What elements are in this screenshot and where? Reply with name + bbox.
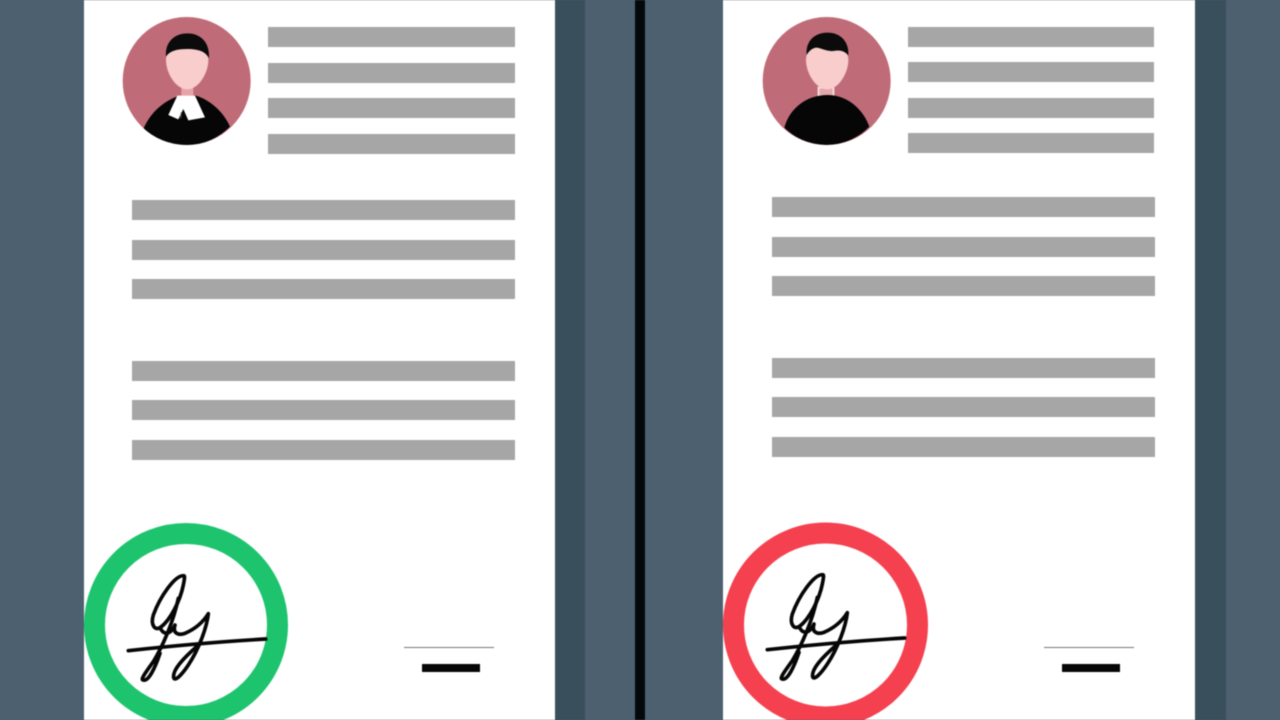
icon: avatar plain [763, 17, 891, 145]
date line [1044, 647, 1134, 648]
date mark [1062, 664, 1120, 672]
red ring [734, 533, 918, 717]
panel: left document [84, 0, 555, 720]
header text lines [908, 27, 1154, 153]
body text lines, first paragraph [132, 200, 515, 299]
date mark [422, 664, 480, 672]
signature [128, 576, 266, 680]
icon: avatar with collar [123, 17, 251, 146]
body text lines, second paragraph [132, 361, 515, 460]
header text lines [268, 27, 515, 154]
panel: right document [723, 0, 1195, 720]
signature [767, 575, 905, 679]
body text lines, second paragraph [772, 358, 1155, 457]
body text lines, first paragraph [772, 197, 1155, 296]
date line [404, 647, 494, 648]
green ring [94, 534, 278, 716]
